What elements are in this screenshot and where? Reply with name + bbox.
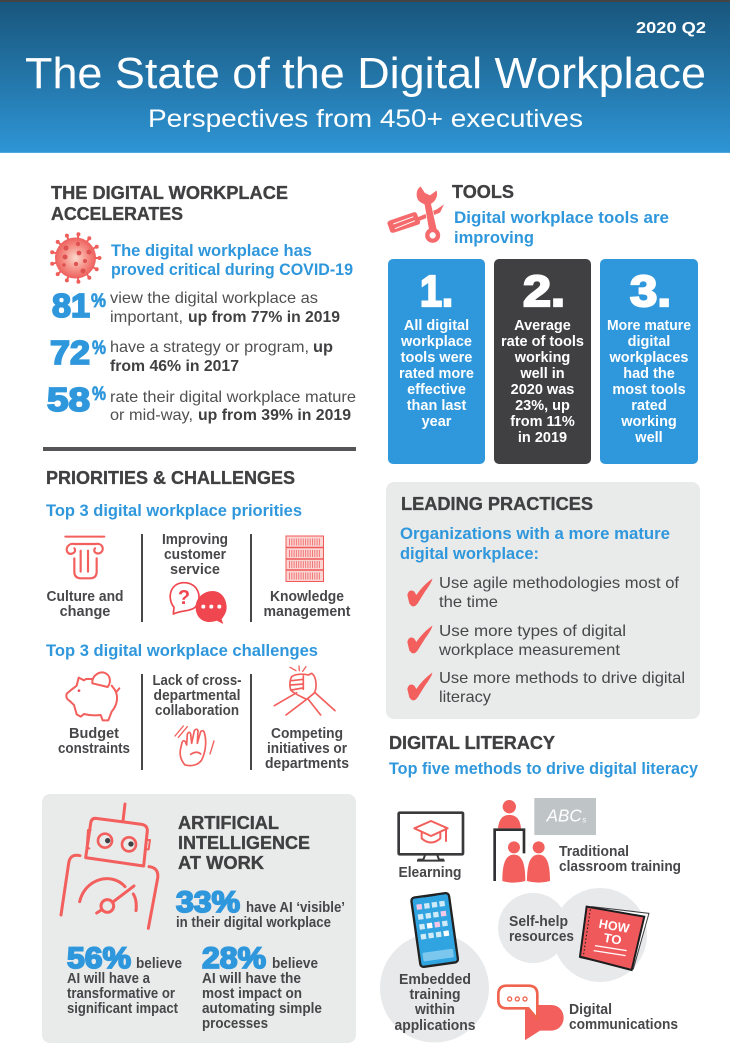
challenge: competing initiatives: Competing bbox=[271, 726, 343, 742]
practice 2: Use more types of digital bbox=[439, 623, 626, 640]
subheading: digital workplace: bbox=[400, 545, 539, 563]
background circle: embedded training bbox=[380, 934, 489, 1042]
icon: monitor with graduation cap bbox=[399, 813, 463, 861]
stat: 58%: up from 39% in 2019 bbox=[198, 407, 351, 424]
card: finding 1: rated more bbox=[399, 366, 474, 382]
method: embedded training bbox=[394, 972, 476, 1034]
subheading bbox=[454, 209, 669, 247]
panel: the digital workplace accelerates bbox=[47, 182, 356, 424]
stat: 72%: 72 bbox=[50, 334, 90, 371]
title: The State of the Digital Workplace bbox=[25, 49, 706, 98]
heading bbox=[178, 812, 310, 873]
stat: 81%: 81 bbox=[52, 287, 90, 324]
subheading: Organizations with a more mature bbox=[400, 525, 670, 543]
practice 3 bbox=[407, 670, 685, 706]
panel: leading practices bbox=[386, 482, 700, 719]
challenge: budget constraints: Budget bbox=[69, 726, 119, 742]
stat: 72%: % bbox=[92, 338, 106, 359]
practice 1 bbox=[407, 575, 680, 611]
heading: INTELLIGENCE bbox=[178, 832, 310, 853]
icon: column bbox=[65, 537, 104, 578]
heading: DIGITAL LITERACY bbox=[389, 732, 556, 753]
issue date: 2020 Q2 bbox=[636, 20, 706, 37]
panel: priorities and challenges bbox=[46, 467, 351, 772]
stat: 58% bbox=[47, 381, 356, 424]
stat: 56% bbox=[67, 942, 182, 1017]
card: finding 1: workplace bbox=[400, 334, 472, 350]
heading: ARTIFICIAL bbox=[178, 812, 279, 833]
method: digital communications bbox=[569, 1002, 678, 1033]
card: finding 3 bbox=[600, 259, 698, 464]
panel: artificial intelligence at work bbox=[42, 794, 356, 1043]
method: self-help resources: resources bbox=[509, 929, 574, 945]
stat: 56%: transformative or bbox=[67, 986, 175, 1002]
stat: 72%: from 46% in 2017 bbox=[110, 358, 239, 375]
stat: 72% bbox=[50, 334, 333, 375]
priority: knowledge management: management bbox=[264, 604, 351, 620]
challenge: competing initiatives: departments bbox=[265, 756, 349, 772]
card: finding 2 bbox=[494, 259, 591, 464]
icon: wrench and screwdriver bbox=[387, 186, 444, 241]
icon: speech bubbles bbox=[170, 583, 227, 624]
panel: tools bbox=[387, 181, 698, 464]
stat: 28%: AI will have the bbox=[202, 971, 301, 987]
priority: knowledge management: Knowledge bbox=[270, 589, 344, 605]
subheading bbox=[400, 525, 670, 563]
stat: 28%: automating simple bbox=[202, 1001, 322, 1017]
card: finding 3: 3. bbox=[630, 267, 671, 316]
stat: 56%: significant impact bbox=[67, 1001, 178, 1017]
heading: ACCELERATES bbox=[51, 203, 183, 224]
icon: speech bubbles: ? bbox=[178, 587, 190, 609]
stat: 58%: or mid-way, bbox=[110, 407, 193, 424]
stat: 56%: 56% bbox=[67, 942, 131, 975]
card: finding 2: 2020 was bbox=[511, 382, 574, 398]
challenge: lack of collaboration: Lack of cross- bbox=[152, 673, 242, 689]
heading: THE DIGITAL WORKPLACE bbox=[51, 182, 288, 203]
challenge: competing initiatives: initiatives or bbox=[267, 741, 347, 757]
method: digital communications: communications bbox=[569, 1017, 678, 1033]
card: finding 1: effective bbox=[407, 382, 466, 398]
icon: bookshelf bbox=[286, 536, 324, 582]
priority: improving customer service: customer bbox=[164, 547, 226, 563]
stat: 56%: AI will have a bbox=[67, 971, 151, 987]
stat: 28%: most impact on bbox=[202, 986, 302, 1002]
heading: LEADING PRACTICES bbox=[401, 493, 593, 514]
subtitle: Perspectives from 450+ executives bbox=[148, 105, 583, 133]
stat: 28%: 28% bbox=[202, 942, 266, 975]
challenge: lack of collaboration: departmental bbox=[154, 688, 240, 704]
priority: culture and change bbox=[46, 589, 124, 620]
icon: chat bubbles bbox=[498, 986, 564, 1040]
subheading: Top five methods to drive digital literacy bbox=[389, 760, 699, 778]
panel: digital literacy bbox=[380, 732, 699, 1042]
card: finding 1: than last bbox=[407, 398, 466, 414]
card: finding 3: had the bbox=[623, 366, 675, 382]
card: finding 3: rated bbox=[631, 398, 667, 414]
card: finding 1: year bbox=[422, 414, 452, 430]
stat: 81%: view the digital workplace as bbox=[110, 290, 318, 307]
stat: 28% bbox=[202, 942, 322, 1032]
subheading: priorities: Top 3 digital workplace priorities bbox=[46, 502, 302, 520]
method: traditional classroom training bbox=[559, 844, 681, 875]
subheading: improving bbox=[454, 229, 534, 247]
practice 1: Use agile methodologies most of bbox=[439, 575, 680, 592]
subheading: challenges: Top 3 digital workplace challenges bbox=[46, 642, 318, 660]
stat: 81% bbox=[52, 287, 340, 326]
stat: 72%: up bbox=[313, 339, 333, 356]
challenge: lack of collaboration bbox=[152, 673, 242, 719]
stat: 28%: believe bbox=[272, 956, 318, 972]
subheading: covid bbox=[111, 242, 353, 279]
header banner bbox=[0, 0, 730, 153]
card: finding 3: workplaces bbox=[608, 350, 688, 366]
method: digital communications: Digital bbox=[569, 1002, 612, 1018]
background circles: self-help bbox=[498, 888, 647, 982]
stat: 58%: % bbox=[92, 384, 106, 405]
stat: 58%: rate their digital workplace mature bbox=[110, 389, 356, 406]
card: finding 3: More mature bbox=[607, 318, 691, 334]
icon: handshake bbox=[274, 666, 335, 715]
icon: how-to book bbox=[580, 907, 649, 970]
card: finding 2: in 2019 bbox=[518, 430, 567, 446]
practice 2: workplace measurement bbox=[438, 642, 621, 659]
practice 1: the time bbox=[439, 594, 498, 611]
stat: 81%: up from 77% in 2019 bbox=[188, 309, 340, 326]
card: finding 1 bbox=[388, 259, 485, 464]
icon: classroom bbox=[495, 798, 596, 883]
card: finding 1: All digital bbox=[404, 318, 469, 334]
practice 3: literacy bbox=[439, 689, 491, 706]
card: finding 2: rate of tools bbox=[501, 334, 584, 350]
card: finding 3: digital bbox=[628, 334, 670, 350]
stat: 81%: % bbox=[91, 291, 106, 312]
icon: how-to book: TO bbox=[602, 931, 623, 948]
method: elearning: Elearning bbox=[398, 865, 462, 881]
method: traditional classroom training: Traditional bbox=[559, 844, 629, 860]
heading: TOOLS bbox=[452, 181, 514, 202]
method: embedded training: training bbox=[410, 987, 460, 1003]
challenge: lack of collaboration: collaboration bbox=[155, 703, 239, 719]
subheading: Digital workplace tools are bbox=[454, 209, 669, 227]
card: finding 2: working bbox=[514, 350, 570, 366]
method: self-help resources bbox=[509, 914, 574, 945]
card: finding 2: well in bbox=[519, 366, 565, 382]
subheading: covid: The digital workplace has bbox=[111, 242, 312, 260]
priority: culture and change: change bbox=[60, 604, 110, 620]
stat: 33%: in their digital workplace bbox=[176, 915, 331, 931]
method: traditional classroom training: classroom training bbox=[559, 859, 681, 875]
method: embedded training: applications bbox=[394, 1018, 476, 1034]
card: finding 2: 23%, up bbox=[515, 398, 570, 414]
icon: classroom: ABC bbox=[546, 806, 583, 826]
stat: 33%: have AI ‘visible’ bbox=[246, 900, 345, 916]
priority: improving customer service bbox=[162, 532, 228, 578]
priority: culture and change: Culture and bbox=[46, 589, 124, 605]
icon: piggy bank bbox=[66, 672, 119, 720]
card: finding 3: working bbox=[620, 414, 677, 430]
stat: 33%: 33% bbox=[176, 886, 240, 919]
method: embedded training: Embedded bbox=[399, 972, 471, 988]
card: finding 2: Average bbox=[514, 318, 571, 334]
stat: 56%: believe bbox=[136, 956, 182, 972]
challenge: budget constraints: constraints bbox=[58, 741, 130, 757]
stat: 28%: processes bbox=[202, 1016, 268, 1032]
priority: improving customer service: Improving bbox=[162, 532, 228, 548]
icon: smartphone bbox=[411, 892, 458, 967]
priority: improving customer service: service bbox=[170, 562, 220, 578]
card: finding 3: well bbox=[634, 430, 663, 446]
stat: 58%: 58 bbox=[47, 381, 90, 418]
icon: classroom: s bbox=[582, 815, 586, 824]
subheading: covid: proved critical during COVID-19 bbox=[111, 261, 353, 279]
icon: virus bbox=[50, 232, 102, 284]
challenge: competing initiatives bbox=[265, 726, 349, 772]
challenge: budget constraints bbox=[58, 726, 130, 757]
card: finding 2: 2. bbox=[523, 267, 565, 316]
stat: 72%: have a strategy or program, bbox=[110, 339, 309, 356]
practice 2 bbox=[407, 623, 626, 659]
icon: waving hand bbox=[175, 726, 214, 766]
priority: knowledge management bbox=[264, 589, 351, 620]
heading: PRIORITIES & CHALLENGES bbox=[46, 467, 295, 488]
card: finding 1: 1. bbox=[420, 267, 453, 316]
card: finding 3: most tools bbox=[612, 382, 686, 398]
stat: 33% bbox=[176, 886, 345, 931]
icon: robot bbox=[61, 804, 158, 928]
method: embedded training: within bbox=[414, 1002, 455, 1018]
method: self-help resources: Self-help bbox=[509, 914, 568, 930]
heading bbox=[51, 182, 288, 224]
card: finding 1: tools were bbox=[401, 350, 472, 366]
practice 3: Use more methods to drive digital bbox=[439, 670, 685, 687]
card: finding 2: from 11% bbox=[510, 414, 575, 430]
heading: AT WORK bbox=[178, 852, 265, 873]
stat: 81%: important, bbox=[110, 309, 183, 326]
icon: how-to book: HOW bbox=[598, 917, 630, 936]
